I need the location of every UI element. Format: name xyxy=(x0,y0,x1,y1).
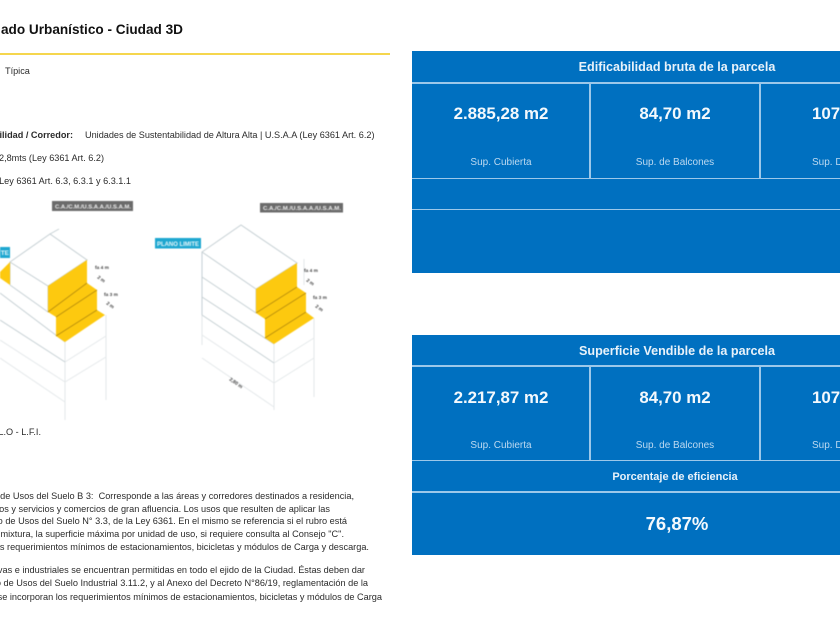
dimensions: left: 2 m xyxy=(96,275,106,284)
dimensions: right xyxy=(228,268,327,390)
stat label: sup. cubierta: Sup. Cubierta xyxy=(470,440,532,450)
dimensions: right: fa 3 m xyxy=(313,295,327,301)
dimensions: left xyxy=(95,265,118,310)
text block: usos del suelo B3: es requerimientos mínimos de estacionamientos, bicicletas y módulos de Carga y descarga. xyxy=(0,542,369,552)
text block: usos del suelo B3 xyxy=(0,491,369,552)
label: left section tag: C.A./C.M./U.S.A.A./U.S.A.M. xyxy=(55,204,131,210)
label: right plano limite xyxy=(155,238,201,248)
text: corredor label: ilidad / Corredor: xyxy=(0,130,73,140)
text block: usos del suelo B3: tos y servicios y comercios de gran afluencia. Los usos que resulten de aplicar las xyxy=(0,504,330,514)
label: left section tag xyxy=(52,201,133,211)
stat: balcones: 84,70 m2 xyxy=(639,104,711,123)
dimensions: left: fa 3 m xyxy=(104,292,118,298)
heading: Edificabilidad bruta de la parcela xyxy=(579,60,775,74)
dimensions: right: fa 4 m xyxy=(304,268,318,274)
subheading: eficiencia: Porcentaje de eficiencia xyxy=(612,470,738,482)
text block: usos del suelo B3: ro de Usos del Suelo N° 3.3, de la Ley 6361. En el mismo se referencia si el rubro está xyxy=(0,516,347,526)
heading: Superficie Vendible de la parcela xyxy=(579,344,775,358)
text block: actividades productivas: o de Usos del Suelo Industrial 3.11.2, y al Anexo del Decreto N°86/19, reglamentación de la xyxy=(0,578,368,588)
diagram: isometric volumes xyxy=(0,200,344,420)
diagram: right volume xyxy=(202,225,314,410)
label: left plano limite xyxy=(0,247,10,258)
label: right section tag xyxy=(260,203,343,212)
text: retiros: Ley 6361 Art. 6.3, 6.3.1 y 6.3.1.1 xyxy=(0,176,131,186)
panel: edificabilidad bruta xyxy=(412,51,840,273)
text: altura: 2,8mts (Ley 6361 Art. 6.2) xyxy=(0,153,104,163)
text block: actividades productivas xyxy=(0,565,382,602)
label: right section tag: C.A./C.M./U.S.A.A./U.S.A.M. xyxy=(263,206,342,212)
dimensions: right: 2,80 m xyxy=(228,377,244,390)
stat label: balcones: Sup. de Balcones xyxy=(636,440,714,450)
text block: usos del suelo B3: mixtura, la superficie máxima por unidad de uso, si requiere consulta al Consejo "C". xyxy=(0,528,344,538)
text: tipología: Típica xyxy=(5,66,30,76)
stat: sup. cubierta: 2.217,87 m2 xyxy=(454,388,548,406)
title: ado Urbanístico - Ciudad 3D xyxy=(1,22,183,37)
dimensions: right: 2 m xyxy=(314,304,324,313)
label: right plano limite: PLANO LIMITE xyxy=(157,241,200,248)
stat: balcones: 84,70 m2 xyxy=(639,388,711,406)
dimensions: left: fa 4 m xyxy=(95,265,109,271)
stat: sup. cubierta: 2.885,28 m2 xyxy=(454,104,548,123)
stat: eficiencia: 76,87% xyxy=(646,512,708,534)
stat label: sup. cubierta: Sup. Cubierta xyxy=(470,157,532,168)
text block: actividades productivas: tivas e industriales se encuentran permitidas en todo el ejido de la Ciudad. Éstas deben dar xyxy=(0,565,365,575)
diagram: left volume xyxy=(0,229,106,420)
text block: actividades productivas: se incorporan los requerimientos mínimos de estacionamientos, bicicletas y módulos de Carga xyxy=(0,592,382,602)
text block: usos del suelo B3: de Usos del Suelo B 3: Corresponde a las áreas y corredores destinados a residencia, xyxy=(0,491,354,501)
stat label: balcones: Sup. de Balcones xyxy=(636,157,714,168)
text: corredor value: Unidades de Sustentabilidad de Altura Alta | U.S.A.A (Ley 6361 Art. 6.2) xyxy=(85,130,374,140)
panel: superficie vendible xyxy=(412,334,840,554)
dimensions: right: 2 m xyxy=(305,278,315,287)
label: left plano limite: TE xyxy=(1,250,10,257)
dimensions: left: 2 m xyxy=(105,301,115,310)
